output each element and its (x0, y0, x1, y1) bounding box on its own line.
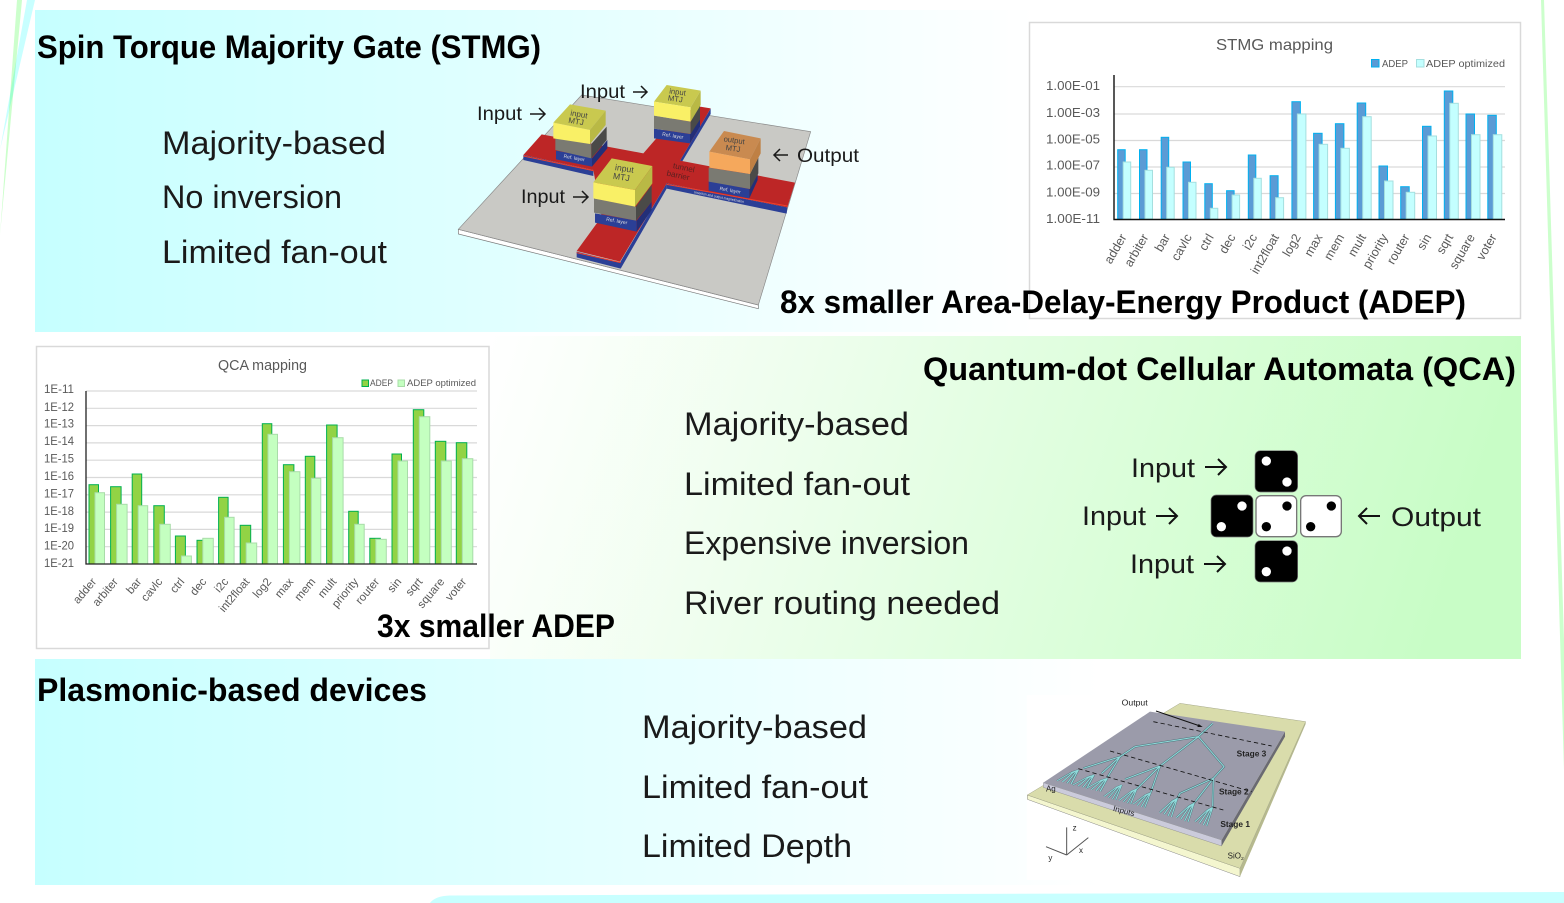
text block: QCA properties: River routing needed (684, 585, 1000, 621)
x axis labels: priority (1360, 231, 1391, 271)
axes icon: z (1073, 824, 1077, 833)
heading: plasmonic: Plasmonic-based devices (37, 672, 427, 708)
heading: STMG: Spin Torque Majority Gate (STMG) (37, 29, 541, 65)
MTJ: left input: Ref. layer (563, 154, 585, 163)
label: output: Output (797, 146, 860, 167)
text block: QCA properties: Majority-based (684, 406, 909, 442)
QCA chart title: QCA mapping (218, 358, 307, 374)
MTJ: top input: MTJ (667, 93, 684, 104)
chart legend (1372, 58, 1505, 70)
bar chart: STMG mapping (1030, 22, 1520, 318)
text block: plasmonic properties: Limited fan-out (642, 769, 868, 805)
text block: plasmonic properties: Limited Depth (642, 828, 852, 864)
QCA y axis labels: 1E-21 (44, 556, 74, 570)
QCA bars: ADEP optimized (95, 417, 473, 564)
x axis labels: dec (1216, 232, 1238, 256)
QCA y axis labels: 1E-17 (44, 486, 74, 500)
label: QCA input middle: Input (1082, 501, 1147, 531)
y axis labels: 1.00E-09 (1046, 184, 1100, 200)
x axis labels: voter (1474, 232, 1500, 263)
QCA x axis labels: max (273, 576, 296, 601)
text block: STMG properties (162, 125, 387, 270)
MTJ: output: MTJ (725, 143, 741, 154)
MTJ: output (709, 131, 761, 198)
x axis labels: ctrl (1196, 232, 1217, 253)
plasmonic labels: SiO (1228, 851, 1241, 860)
MTJ: bottom input: input (614, 162, 635, 175)
text block: STMG properties: Limited fan-out (162, 234, 387, 270)
QCA y axis labels: 1E-12 (44, 400, 74, 414)
label: QCA input top (1131, 453, 1226, 483)
label: tunnel barrier: tunnel (672, 161, 696, 175)
QCA x axis labels: arbiter (91, 576, 121, 609)
plasmonic labels: Ag (1046, 784, 1056, 793)
QCA y axis labels: 1E-15 (44, 452, 74, 466)
text block: QCA properties: Limited fan-out (684, 466, 910, 502)
plasmonic labels: Output (1122, 697, 1148, 707)
MTJ: top input: Ref. layer (662, 132, 684, 141)
diagram: STMG device (458, 85, 811, 309)
label: QCA output: Output (1391, 502, 1482, 532)
QCA x axis labels: cavlc (139, 576, 165, 604)
label: QCA input top: Input (1131, 453, 1196, 483)
plasmonic labels: Stage 3 (1237, 749, 1267, 759)
MTJ: bottom input: MTJ (612, 171, 631, 183)
QCA x axis labels: mem (293, 576, 318, 604)
QCA y axis labels (44, 382, 74, 570)
panel: plasmonic (35, 659, 1313, 885)
MTJ: bottom input: Ref. layer (606, 217, 628, 226)
text block: QCA properties (684, 406, 1000, 621)
x axis labels: max (1302, 231, 1326, 259)
QCA y axis labels: 1E-19 (44, 521, 74, 535)
label: output (774, 146, 860, 167)
label: QCA output (1359, 502, 1482, 532)
x axis labels: bar (1152, 232, 1173, 254)
MTJ: bottom input (593, 158, 652, 232)
QCA x axis labels: ctrl (168, 576, 187, 596)
x axis labels: log2 (1280, 231, 1304, 259)
text block: plasmonic properties (642, 709, 868, 864)
axes icon: y (1048, 854, 1052, 863)
bars: ADEP optimized (1123, 103, 1502, 219)
QCA chart legend (362, 378, 476, 389)
plasmonic labels: Stage 1 (1220, 819, 1250, 829)
x axis labels (1101, 231, 1500, 276)
x axis labels: square (1447, 231, 1478, 272)
label: QCA input bottom: Input (1130, 549, 1195, 579)
x axis labels: adder (1101, 231, 1130, 266)
y axis labels: 1.00E-07 (1046, 158, 1100, 172)
x axis labels: sin (1414, 231, 1434, 252)
y axis labels: 1.00E-01 (1046, 78, 1100, 93)
callout: QCA ADEP: 3x smaller ADEP (377, 608, 615, 644)
label: tunnel barrier: barrier (666, 169, 691, 182)
x axis labels: mem (1321, 232, 1347, 263)
y axis labels: 1.00E-11 (1046, 211, 1100, 226)
diagram: QCA majority cells (1211, 451, 1341, 582)
label: substrate layer: Insertion and output magnetization (694, 190, 744, 204)
panel: STMG (35, 10, 1035, 332)
chart legend: ADEP optimized (1426, 58, 1505, 70)
text block: plasmonic properties: Majority-based (642, 709, 867, 745)
diagram: plasmonic device (1027, 695, 1313, 880)
QCA x axis labels: dec (188, 576, 209, 598)
y axis labels (1046, 78, 1100, 226)
MTJ: left input (553, 104, 607, 167)
label: input left (477, 104, 545, 125)
label: QCA input middle (1082, 501, 1177, 531)
label: input bottom (521, 187, 588, 208)
chart title: STMG mapping (1216, 37, 1333, 54)
plasmonic labels: Stage 2 (1219, 787, 1249, 797)
MTJ: left input: MTJ (568, 116, 585, 127)
QCA y axis labels: 1E-20 (44, 538, 74, 552)
QCA x axis labels: sqrt (404, 576, 426, 599)
label: input bottom: Input (521, 187, 566, 208)
MTJ: top input (654, 85, 701, 143)
axes icon: x (1079, 846, 1083, 855)
x axis labels: arbiter (1122, 231, 1151, 269)
QCA y axis labels: 1E-13 (44, 416, 74, 430)
y axis labels: 1.00E-03 (1046, 105, 1100, 120)
QCA x axis labels: i2c (213, 576, 231, 595)
label: input top (580, 82, 647, 103)
QCA x axis labels: square (415, 576, 447, 611)
QCA x axis labels: log2 (251, 576, 274, 601)
QCA x axis labels: mult (316, 576, 340, 601)
bars: ADEP (1118, 91, 1496, 219)
plasmonic waveguide tree (1057, 723, 1224, 826)
text block: QCA properties: Expensive inversion (684, 525, 969, 561)
QCA y axis labels: 1E-18 (44, 504, 74, 518)
QCA y axis labels: 1E-14 (44, 434, 74, 448)
x axis labels: sqrt (1434, 231, 1456, 257)
QCA chart legend: ADEP (370, 378, 393, 389)
chart legend: ADEP (1382, 58, 1408, 70)
x axis labels: mult (1345, 231, 1369, 259)
plasmonic labels: Inputs (1112, 804, 1136, 818)
text block: STMG properties: Majority-based (162, 125, 386, 161)
MTJ: output: output (723, 134, 746, 146)
plasmonic labels: 2 (1241, 856, 1244, 862)
QCA x axis labels: priority (330, 576, 361, 610)
bar chart: QCA mapping (36, 346, 489, 648)
MTJ: output: Ref. layer (719, 186, 741, 196)
QCA bars: ADEP (89, 410, 467, 564)
plasmonic labels (1046, 697, 1267, 862)
QCA x axis labels: bar (124, 576, 144, 597)
QCA x axis labels: sin (386, 576, 404, 595)
MTJ: left input: input (570, 108, 589, 120)
axes icon (1046, 824, 1088, 863)
QCA x axis labels: adder (71, 576, 99, 606)
label: input top: Input (580, 82, 626, 103)
label: QCA input bottom (1130, 549, 1225, 579)
x axis labels: i2c (1240, 232, 1260, 252)
panel: QCA (490, 336, 1521, 659)
QCA x axis labels: int2float (217, 576, 253, 615)
QCA x axis labels (71, 576, 469, 615)
x axis labels: router (1384, 232, 1413, 267)
callout: STMG ADEP: 8x smaller Area-Delay-Energy Product (ADEP) (780, 284, 1466, 320)
text block: STMG properties: No inversion (162, 179, 342, 215)
x axis labels: cavlc (1169, 232, 1195, 263)
heading: QCA: Quantum-dot Cellular Automata (QCA) (923, 351, 1516, 387)
QCA x axis labels: voter (444, 576, 469, 604)
MTJ: top input: input (669, 86, 687, 98)
QCA x axis labels: router (354, 576, 382, 607)
x axis labels: int2float (1248, 231, 1282, 276)
QCA y axis labels: 1E-11 (44, 382, 74, 396)
y axis labels: 1.00E-05 (1046, 132, 1100, 146)
QCA chart legend: ADEP optimized (407, 378, 476, 389)
label: input left: Input (477, 104, 523, 125)
QCA y axis labels: 1E-16 (44, 469, 74, 483)
